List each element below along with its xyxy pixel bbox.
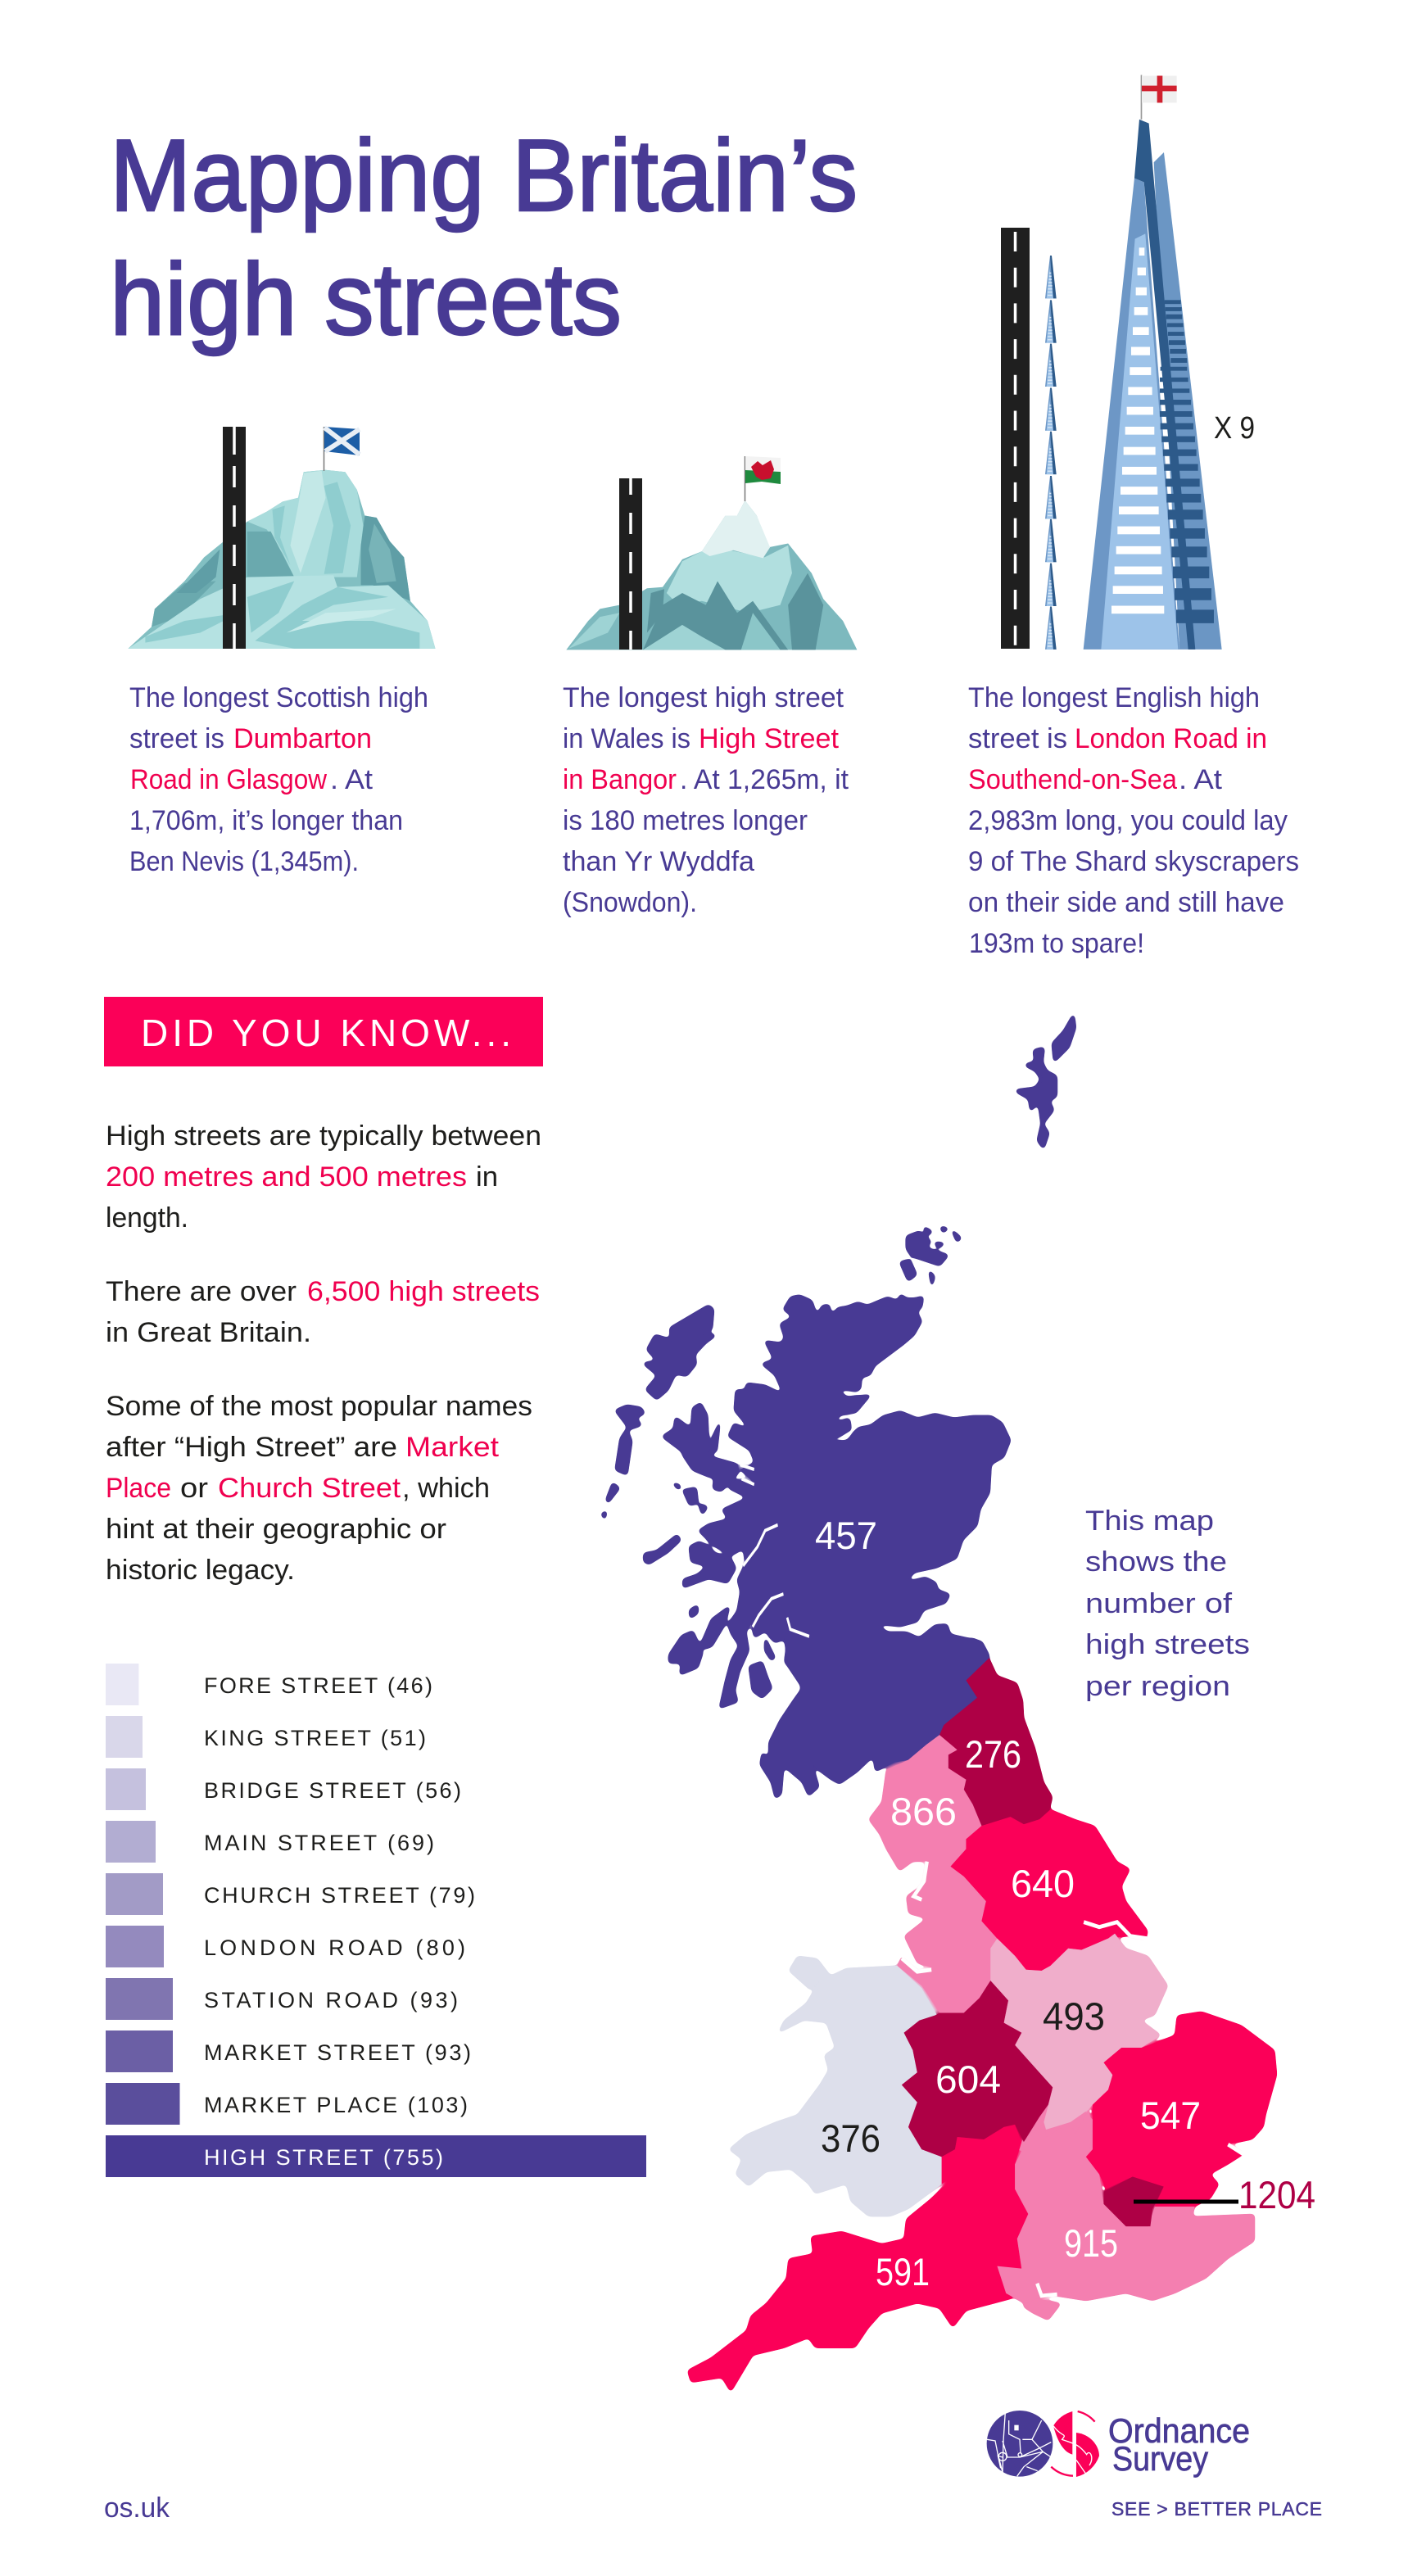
- text block: did you know facts: historic legacy.: [106, 1555, 295, 1586]
- text block: map explanation: This map: [1085, 1505, 1214, 1537]
- text block: Scotland: street is: [129, 723, 224, 754]
- text block: did you know facts: High streets are typically between: [106, 1120, 541, 1152]
- text block: did you know facts: 200 metres and 500 metres: [106, 1161, 467, 1193]
- text block: did you know facts: , which: [402, 1473, 490, 1504]
- region: North East: [939, 1658, 1075, 1826]
- map labels: high streets per region: 915: [1064, 2221, 1118, 2265]
- flag: Wales: [745, 456, 781, 501]
- bar chart: most popular street names: STATION ROAD (93): [204, 1988, 458, 2012]
- text block: did you know facts: hint at their geographic or: [106, 1514, 446, 1545]
- map labels: high streets per region: 376: [821, 2116, 881, 2160]
- map labels: high streets per region: [815, 1514, 1201, 2293]
- text block: England: street is: [968, 723, 1067, 754]
- map: England, Wales and southern Scotland regions: [687, 1638, 1277, 2393]
- wordmark: [1108, 2411, 1250, 2478]
- website: os.uk: [104, 2492, 170, 2524]
- text block: did you know facts: 6,500 high streets: [307, 1276, 540, 1307]
- map labels: high streets per region: 276: [965, 1732, 1021, 1776]
- text block: Scotland: . At: [330, 764, 374, 795]
- map: regions of Great Britain: [602, 1016, 1277, 2393]
- label: times nine: X 9: [1214, 411, 1255, 446]
- logo: Ordnance Survey: [987, 2411, 1250, 2478]
- callout: London 1204 with leader line: [1134, 2173, 1315, 2216]
- text block: did you know facts: [106, 1120, 541, 1586]
- text block: Scotland: Dumbarton: [233, 723, 372, 754]
- text block: Scotland: Road in Glasgow: [130, 764, 327, 795]
- map labels: high streets per region: 640: [1011, 1862, 1075, 1905]
- text block: Wales: than Yr Wyddfa: [563, 846, 754, 877]
- text block: did you know facts: in Great Britain.: [106, 1317, 311, 1348]
- region: East of England: [1086, 2012, 1277, 2207]
- islands: Hebrides: [602, 1306, 775, 1697]
- bar chart: most popular street names: MARKET PLACE (103): [204, 2093, 468, 2117]
- region: South West: [687, 2125, 1028, 2393]
- islands: Orkney: [900, 1227, 961, 1286]
- text block: map explanation: per region: [1085, 1671, 1230, 1702]
- region: South East: [997, 2110, 1255, 2320]
- bar chart: most popular street names: BRIDGE STREET (56): [204, 1778, 461, 1803]
- title: [110, 120, 858, 356]
- region: North West: [868, 1735, 997, 2013]
- flag: Scotland: [324, 427, 360, 471]
- text block: did you know facts: Some of the most popular names: [106, 1391, 532, 1422]
- map labels: high streets per region: 457: [815, 1514, 877, 1557]
- text block: did you know facts: or: [180, 1473, 208, 1504]
- text block: England: 9 of The Shard skyscrapers: [968, 846, 1299, 877]
- text block: England: 193m to spare!: [969, 928, 1144, 959]
- flag: England: [1141, 75, 1177, 120]
- road: [223, 427, 246, 649]
- bar chart: most popular street names: FORE STREET (46): [204, 1673, 432, 1698]
- text block: did you know facts: Market: [405, 1432, 500, 1463]
- island: Shetland: [1016, 1016, 1075, 1148]
- title: Mapping Britain’s: [110, 120, 858, 233]
- illustration: The Shard, road and flag: [1001, 75, 1255, 650]
- tagline: SEE > BETTER PLACE: [1111, 2498, 1322, 2519]
- callout: London 1204 with leader line: 1204: [1238, 2173, 1315, 2216]
- text block: Wales: is 180 metres longer: [563, 805, 808, 836]
- bar chart: most popular street names: [106, 1664, 646, 2177]
- text block: map explanation: number of: [1085, 1588, 1233, 1619]
- region: East Midlands: [990, 1934, 1168, 2130]
- text block: did you know facts: after “High Street” are: [106, 1432, 397, 1463]
- text block: Wales: in Wales is: [563, 723, 690, 754]
- mainland: north Scotland: [698, 1293, 1011, 1736]
- text block: Wales: (Snowdon).: [563, 887, 697, 918]
- mountain: Yr Wyddfa: [566, 500, 857, 650]
- map: Scotland north and islands: [602, 1016, 1075, 1736]
- wordmark: Ordnance: [1108, 2411, 1250, 2450]
- text block: map explanation: shows the: [1085, 1546, 1227, 1578]
- illustration: Scottish mountain, road and flag: [128, 427, 436, 649]
- estuaries: [902, 1862, 1243, 2296]
- text block: did you know facts: length.: [106, 1202, 188, 1234]
- building: The Shard: [1084, 120, 1222, 650]
- text block: Wales: High Street: [699, 723, 840, 754]
- text block: England: The longest English high: [968, 682, 1260, 713]
- text block: did you know facts: Place: [106, 1473, 171, 1504]
- illustration: Welsh mountain, road and flag: [566, 456, 857, 650]
- bar chart: most popular street names: HIGH STREET (755): [204, 2145, 443, 2170]
- text block: did you know facts: There are over: [106, 1276, 297, 1307]
- road: [619, 478, 642, 650]
- map labels: high streets per region: 591: [876, 2250, 930, 2293]
- icons: nine small Shards: [1045, 256, 1057, 650]
- map labels: high streets per region: 866: [890, 1790, 957, 1833]
- road: [1001, 228, 1030, 649]
- region: West Midlands: [902, 1981, 1053, 2157]
- wordmark: Survey: [1112, 2439, 1208, 2478]
- bar chart: most popular street names: CHURCH STREET (79): [204, 1883, 475, 1908]
- text block: England: on their side and still have: [968, 887, 1284, 918]
- region: Wales: [728, 1956, 942, 2216]
- region: South East backing: [1017, 2092, 1095, 2164]
- sea lochs: [740, 1465, 809, 1637]
- region: London: [1104, 2177, 1164, 2226]
- text block: England: 2,983m long, you could lay: [968, 805, 1288, 836]
- text block: Scotland: [129, 682, 428, 877]
- banner: did you know: [104, 997, 543, 1066]
- text block: Wales: . At 1,265m, it: [680, 764, 849, 795]
- text block: Scotland: The longest Scottish high: [129, 682, 428, 713]
- text block: map explanation: [1085, 1505, 1250, 1702]
- text block: Wales: The longest high street: [563, 682, 844, 713]
- text block: Scotland: 1,706m, it’s longer than: [129, 805, 403, 836]
- text block: England: [968, 682, 1299, 959]
- text block: did you know facts: in: [476, 1161, 498, 1193]
- text block: England: London Road in: [1075, 723, 1267, 754]
- map labels: high streets per region: 604: [935, 2058, 1001, 2101]
- map labels: high streets per region: 493: [1043, 1994, 1105, 2038]
- text block: England: . At: [1179, 764, 1223, 795]
- icon: OS roundel: [987, 2411, 1099, 2477]
- mountain: Ben Nevis: [128, 470, 436, 649]
- map labels: high streets per region: 547: [1140, 2094, 1201, 2137]
- banner: did you know: DID YOU KNOW...: [141, 1012, 511, 1054]
- bar chart: most popular street names: MAIN STREET (69): [204, 1831, 434, 1855]
- text block: did you know facts: Church Street: [218, 1473, 401, 1504]
- text block: Wales: in Bangor: [563, 764, 677, 795]
- bar chart: most popular street names: LONDON ROAD (80): [204, 1935, 465, 1960]
- region: Yorkshire: [950, 1809, 1148, 1971]
- text block: Wales: [563, 682, 849, 918]
- bar chart: most popular street names: MARKET STREET (93): [204, 2040, 471, 2065]
- title: high streets: [110, 243, 622, 356]
- region: southern Scotland: [759, 1638, 989, 1800]
- text block: map explanation: high streets: [1085, 1629, 1250, 1660]
- bar chart: most popular street names: KING STREET (51): [204, 1726, 426, 1750]
- text block: England: Southend-on-Sea: [968, 764, 1177, 795]
- text block: Scotland: Ben Nevis (1,345m).: [129, 846, 359, 877]
